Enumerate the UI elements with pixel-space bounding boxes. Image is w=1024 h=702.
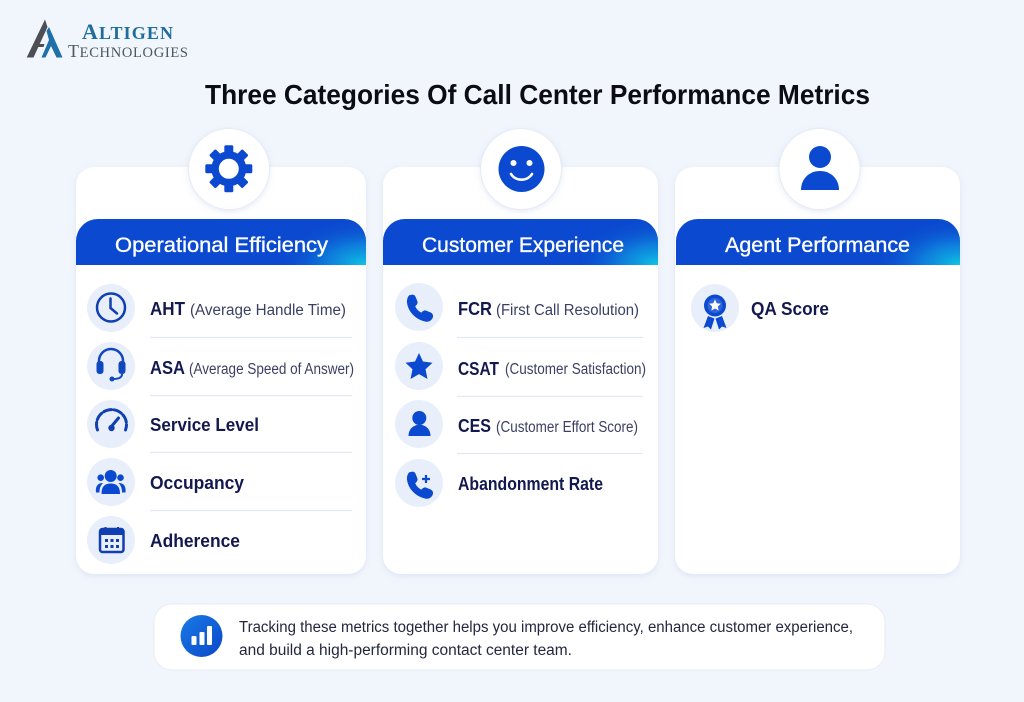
metric: ASA [87, 342, 354, 390]
header: Operational Efficiency [76, 219, 366, 265]
metric: Abandonment Rate [395, 459, 603, 507]
metric: Adherence: Adherence [150, 531, 240, 551]
summary text: Tracking these metrics together helps you improve efficiency, enhance customer experience, [239, 619, 853, 636]
metric: Abandonment Rate: Abandonment Rate [458, 474, 603, 494]
metric: ASA: ASA [150, 358, 185, 378]
summary text: and build a high-performing contact center team. [239, 642, 572, 659]
title: Three Categories Of Call Center Performance Metrics [205, 79, 870, 110]
metric: FCR [395, 283, 639, 331]
metric: ASA: (Average Speed of Answer) [189, 361, 354, 378]
icon: gear [188, 128, 270, 210]
metric: Occupancy: Occupancy [150, 473, 244, 493]
metric: CSAT [395, 342, 646, 390]
logo wordmark: TECHNOLOGIES [68, 41, 188, 61]
logo mark [27, 20, 62, 58]
header: Customer Experience [383, 219, 658, 265]
logo wordmark [68, 19, 188, 61]
panel: Operational Efficiency [76, 128, 366, 574]
metric: AHT [87, 284, 346, 332]
metric: QA Score: QA Score [751, 299, 829, 319]
metric: CES [395, 400, 638, 448]
icon: bar chart [180, 615, 222, 657]
logo wordmark: ALTIGEN [82, 19, 173, 44]
summary text [239, 619, 853, 659]
metric: FCR: FCR [458, 299, 492, 319]
header: Operational Efficiency: Operational Efficiency [115, 234, 329, 257]
metric: FCR: (First Call Resolution) [496, 302, 639, 319]
metric: CES: CES [458, 416, 491, 436]
icon: person [779, 128, 860, 210]
header: Agent Performance: Agent Performance [725, 234, 910, 257]
metric: Service Level [87, 400, 259, 448]
header: Customer Experience: Customer Experience [422, 234, 624, 257]
metric: QA Score [691, 284, 829, 332]
metric: CES: (Customer Effort Score) [496, 419, 638, 436]
metric: AHT: (Average Handle Time) [190, 302, 346, 319]
header: Agent Performance [676, 219, 960, 265]
icon: smiley [480, 128, 562, 210]
panel: Agent Performance [675, 128, 960, 574]
callout: summary [154, 604, 885, 670]
metric: Adherence [87, 516, 240, 564]
metric: Service Level: Service Level [150, 415, 259, 435]
panel: Customer Experience [383, 128, 658, 574]
metric: CSAT: (Customer Satisfaction) [505, 361, 646, 378]
logo: Altigen Technologies [27, 19, 188, 61]
metric: AHT: AHT [150, 299, 185, 319]
metric: CSAT: CSAT [458, 359, 499, 379]
metric: Occupancy [87, 458, 244, 506]
